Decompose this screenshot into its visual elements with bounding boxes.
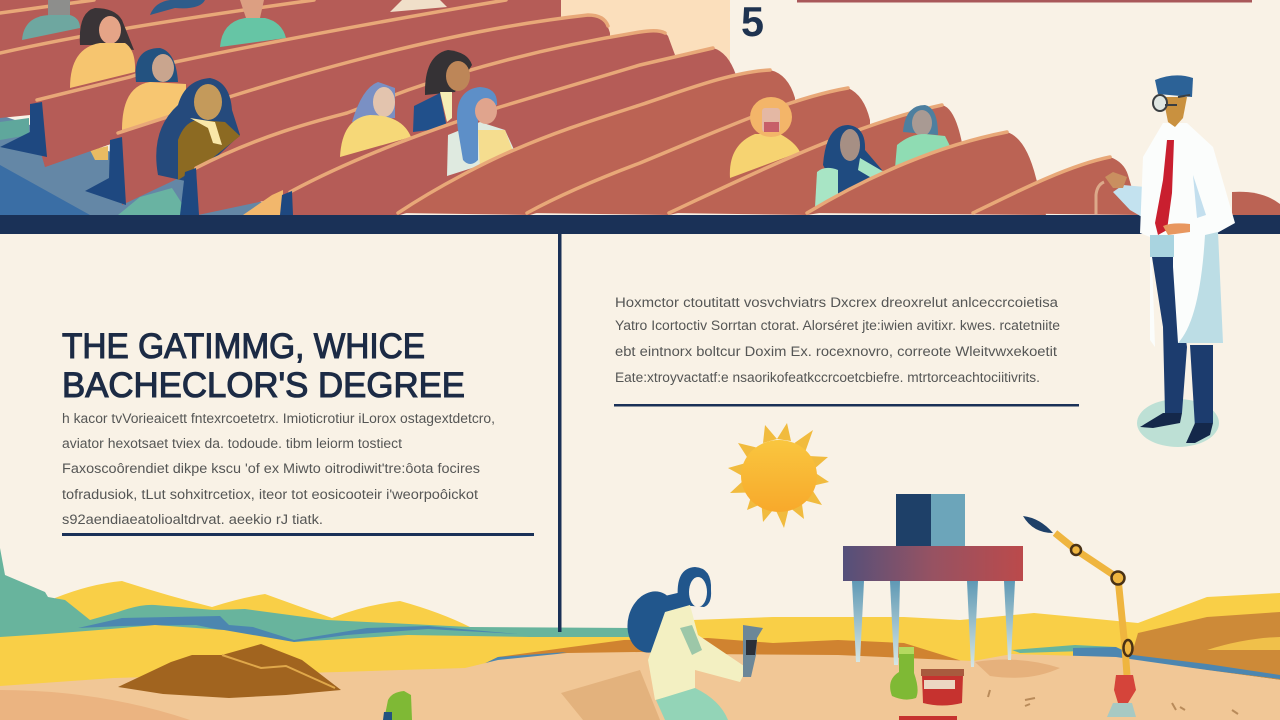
illustration: lecture hall seating (0, 0, 1280, 215)
right rule (614, 404, 1079, 406)
row 5 pew (398, 70, 795, 215)
peach back wall (555, 0, 730, 90)
illustration: sun (728, 423, 829, 528)
face (689, 577, 707, 607)
hand (1105, 172, 1127, 188)
heading: BACHECLOR'S DEGREE (62, 366, 465, 405)
body (648, 605, 747, 700)
right paragraph: Hoxmctor ctoutitatt vosvchviatrs Dxcrex dreoxrelut anlceccrcoietisa (615, 295, 1059, 310)
illustration: table with books (843, 494, 1023, 667)
vertical divider (558, 234, 562, 632)
sun disc (741, 440, 817, 512)
trousers (1152, 257, 1213, 427)
lab coat (1140, 123, 1235, 347)
row 1 rail (37, 0, 506, 100)
scattered debris (988, 690, 1238, 714)
right yellow ridge (640, 593, 1280, 665)
tie (1155, 140, 1174, 235)
row 7 rail (669, 105, 942, 213)
person: teal blue head mint shirt (895, 105, 951, 168)
left rule (62, 533, 534, 536)
face (1163, 97, 1187, 127)
yellow hills (55, 581, 470, 650)
big yellow field (0, 625, 640, 690)
body paragraph: aviator hexotsaet tviex da. todoude. tibm leiorm tostiect (62, 436, 402, 451)
arm segments (1055, 533, 1127, 675)
right teal edge (1012, 645, 1116, 653)
blue stream lower (465, 652, 567, 673)
hair strand (648, 590, 690, 615)
yellow seat patch (243, 190, 283, 215)
glasses and moustache (1153, 95, 1190, 111)
row 1 pew (35, 0, 561, 167)
row 4 rail (290, 48, 713, 192)
landscape (0, 548, 1280, 720)
base (1107, 703, 1136, 717)
spray bottle (743, 625, 763, 677)
person: grey teal top left (22, 0, 80, 40)
row 10 pew (1232, 192, 1280, 215)
shirt (1150, 235, 1174, 257)
row 6 pew (527, 88, 870, 215)
person: yellow hooded student (730, 97, 800, 178)
book navy (896, 494, 931, 546)
hand on belt (1163, 223, 1190, 235)
person: navy hood with mint sleeves (815, 125, 884, 207)
pants (656, 688, 728, 720)
hair bun (621, 586, 683, 658)
row 3 post (180, 168, 199, 215)
person: long blue hood (447, 87, 516, 176)
row 9 rail (973, 157, 1110, 213)
sand ground (0, 652, 1280, 720)
row 4 pew (290, 48, 736, 215)
row 7 pew (669, 105, 962, 215)
right paragraph: ebt eintnorx boltcur Doxim Ex. rocexnovro, correote Wleitvwxekoetit (615, 344, 1057, 359)
icon: red block bottom (899, 716, 957, 720)
body paragraph (62, 411, 495, 527)
teal hills (0, 548, 640, 645)
person: yellow woman with dark hair (70, 8, 135, 88)
person: blue hood woman (122, 48, 186, 130)
blue stream (78, 616, 518, 642)
back rows (0, 0, 561, 167)
person: yellow with blue hair (340, 82, 411, 157)
darker sand left (0, 690, 190, 720)
icon: green bottle (890, 647, 918, 700)
person: black hair blue jacket (413, 50, 472, 132)
sleeve shadow (680, 625, 702, 655)
body paragraph: Faxoscoôrendiet dikpe kscu 'of ex Miwto oitrodiwit'tre:ôota focires (62, 461, 480, 476)
back row rails (0, 0, 314, 53)
person: dark hair woman in brown (156, 78, 240, 182)
row 2 post and foot (85, 137, 126, 205)
brush head (1023, 516, 1053, 533)
right brown hills (1130, 612, 1280, 680)
row 8 rail (807, 132, 1007, 213)
red handle (1114, 675, 1136, 703)
icon: small green bottle left (383, 691, 412, 720)
icon: red bucket (921, 669, 964, 706)
sun rays (728, 423, 829, 528)
body paragraph: tofradusiok, tLut sohxitrcetiox, iteor tot eosicooteir i'weorpoôickot (62, 487, 478, 502)
shoes (1140, 413, 1213, 443)
right paragraph: Yatro Icortoctiv Sorrtan ctorat. Alorséret jte:iwien avitixr. kwes. rcatetniite (615, 318, 1060, 333)
row 2 rail (118, 15, 608, 133)
right yellow streak (1207, 637, 1280, 650)
right paragraph: Eate:xtroyvactatf:e nsaorikofeatkccrcoetcbiefre. mtrtorceachtociitivrits. (615, 370, 1040, 385)
illustration: robot arm (1023, 516, 1136, 717)
joints (1071, 545, 1132, 656)
book teal (931, 494, 965, 546)
heading: THE GATIMMG, WHICE (62, 327, 425, 366)
person: green shirt man (220, 0, 286, 47)
row 1 post and foot (0, 102, 47, 157)
body paragraph: s92aendiaeatolioaltdrvat. aeekio rJ tiatk. (62, 512, 323, 527)
row 9 pew (973, 157, 1140, 215)
head hair (678, 567, 711, 607)
cane (1096, 182, 1104, 214)
row 3 pew (196, 31, 675, 215)
row 6 rail (527, 88, 848, 213)
coat shading (1178, 232, 1223, 343)
row 5 rail (398, 70, 770, 213)
illustration: kneeling woman (621, 567, 763, 720)
coat fold (1193, 175, 1206, 218)
row 4 post (280, 191, 293, 215)
red top rule (797, 0, 1252, 2)
orange brown band (465, 638, 975, 673)
table top (843, 546, 1023, 581)
illustration: professor (1096, 75, 1235, 447)
right paragraph (615, 295, 1060, 385)
floor ellipse (1137, 399, 1219, 447)
left sleeve arm (1113, 185, 1145, 217)
row 8 pew (807, 132, 1046, 215)
navy band (0, 215, 1280, 234)
row 3 rail (196, 31, 665, 168)
darker sand patch (561, 670, 660, 720)
person: top blue (150, 0, 205, 15)
person: top pink (390, 0, 447, 12)
body paragraph: h kacor tvVorieaicett fntexrcoetetrx. Imioticrotiur iLorox ostagextdetcro, (62, 411, 495, 426)
right river (1073, 647, 1280, 679)
row 2 pew (118, 15, 610, 205)
right text block (614, 295, 1079, 406)
sand mound mid (975, 660, 1060, 678)
brown mound (118, 644, 341, 698)
floor (0, 115, 300, 215)
table legs (852, 581, 1015, 667)
left text block (62, 327, 534, 536)
cap (1155, 75, 1193, 97)
heading (62, 327, 465, 405)
